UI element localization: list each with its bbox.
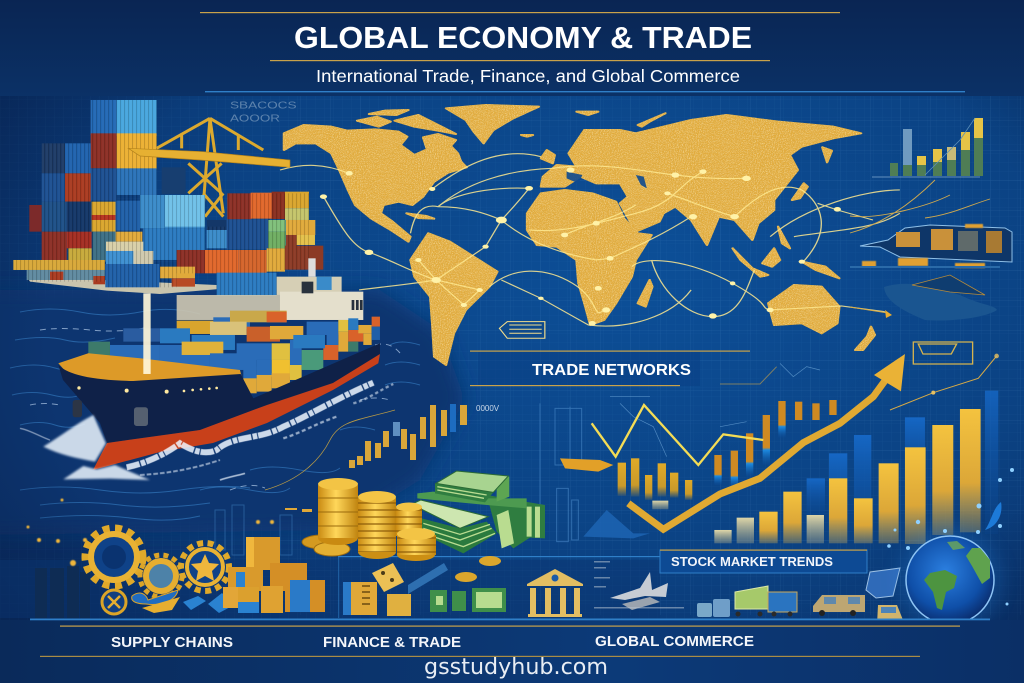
icon: aircraft — [594, 561, 684, 610]
city skyline: lower left — [26, 498, 312, 618]
trade routes — [280, 154, 900, 326]
title header — [0, 0, 1024, 96]
bottom panel: icons background — [0, 556, 668, 618]
loose coins — [302, 535, 350, 556]
gold bars — [759, 409, 981, 544]
scene ship — [884, 284, 997, 321]
cargo ship — [58, 293, 380, 470]
upper stack — [497, 474, 509, 502]
bottom band — [0, 618, 1024, 683]
container ribbing — [13, 100, 309, 296]
mast light — [143, 293, 151, 374]
stock market chart — [540, 342, 999, 544]
label: global commerce: GLOBAL COMMERCE — [595, 634, 754, 650]
candlestick chart: mid left — [265, 404, 500, 490]
label: finance and trade: FINANCE & TRADE — [323, 635, 461, 651]
icon: star gear — [181, 543, 229, 591]
subtitle: International Trade, Finance, and Global Commerce — [316, 66, 740, 86]
chart: top right — [872, 118, 983, 178]
yellow trend line — [592, 405, 763, 465]
world map — [280, 105, 900, 365]
icon: earth globe — [887, 468, 1014, 632]
icon group: finance items — [343, 556, 506, 616]
panel: stock market trends — [660, 550, 867, 573]
rising arrow — [628, 354, 905, 529]
icon group: vans and car — [813, 568, 903, 625]
panel: trade networks — [470, 350, 750, 386]
quay — [27, 277, 217, 294]
hull waterline — [93, 354, 380, 470]
coin stack: small — [396, 502, 422, 536]
coin stack: tall — [318, 478, 358, 545]
coin stack: front — [397, 528, 436, 561]
deck — [58, 353, 242, 382]
faint port text: SBACOCS — [230, 100, 297, 111]
candlesticks — [618, 400, 837, 500]
chart caption: 0000V — [476, 404, 500, 413]
label: supply chains: SUPPLY CHAINS — [111, 635, 233, 651]
port scene: right — [850, 180, 1012, 321]
heading: trade networks: TRADE NETWORKS — [532, 362, 691, 379]
money stacks — [412, 471, 545, 553]
right stack — [487, 495, 545, 548]
hull — [58, 343, 380, 443]
pale bars — [652, 501, 824, 543]
title: GLOBAL ECONOMY & TRADE — [294, 20, 752, 55]
background sketch — [540, 342, 999, 542]
inland seas — [567, 172, 647, 188]
ship bridge — [177, 258, 363, 320]
crane boom — [128, 148, 290, 167]
icon group: cardboard boxes — [223, 537, 325, 613]
heading: stock market trends: STOCK MARKET TRENDS — [671, 554, 833, 569]
faint port text: AOOOR — [230, 114, 280, 125]
crane mast — [157, 118, 263, 217]
lower stack — [422, 518, 497, 553]
icon group: trucks — [697, 586, 797, 617]
bow waves — [20, 383, 393, 480]
icon: small wrench badge — [102, 590, 126, 614]
container port stacks — [13, 100, 363, 320]
route nodes — [320, 167, 841, 326]
continents — [284, 105, 875, 365]
icon: logistics shapes — [132, 590, 234, 613]
coin stack: medium — [358, 491, 396, 559]
gold coins — [302, 478, 436, 561]
sea — [0, 290, 465, 535]
icon group: supply chain gears — [85, 528, 234, 614]
icon: large gear — [85, 528, 143, 586]
icon: bank building — [527, 569, 583, 617]
watermark url: gsstudyhub.com — [424, 655, 608, 680]
anchors and lights — [73, 386, 218, 426]
faint port text — [230, 100, 297, 125]
icon: medium gear — [140, 555, 182, 597]
map cargo label icon — [499, 322, 545, 338]
small badge — [913, 342, 973, 364]
containers — [13, 100, 323, 296]
blue bars — [807, 391, 998, 543]
deck containers — [88, 311, 380, 393]
